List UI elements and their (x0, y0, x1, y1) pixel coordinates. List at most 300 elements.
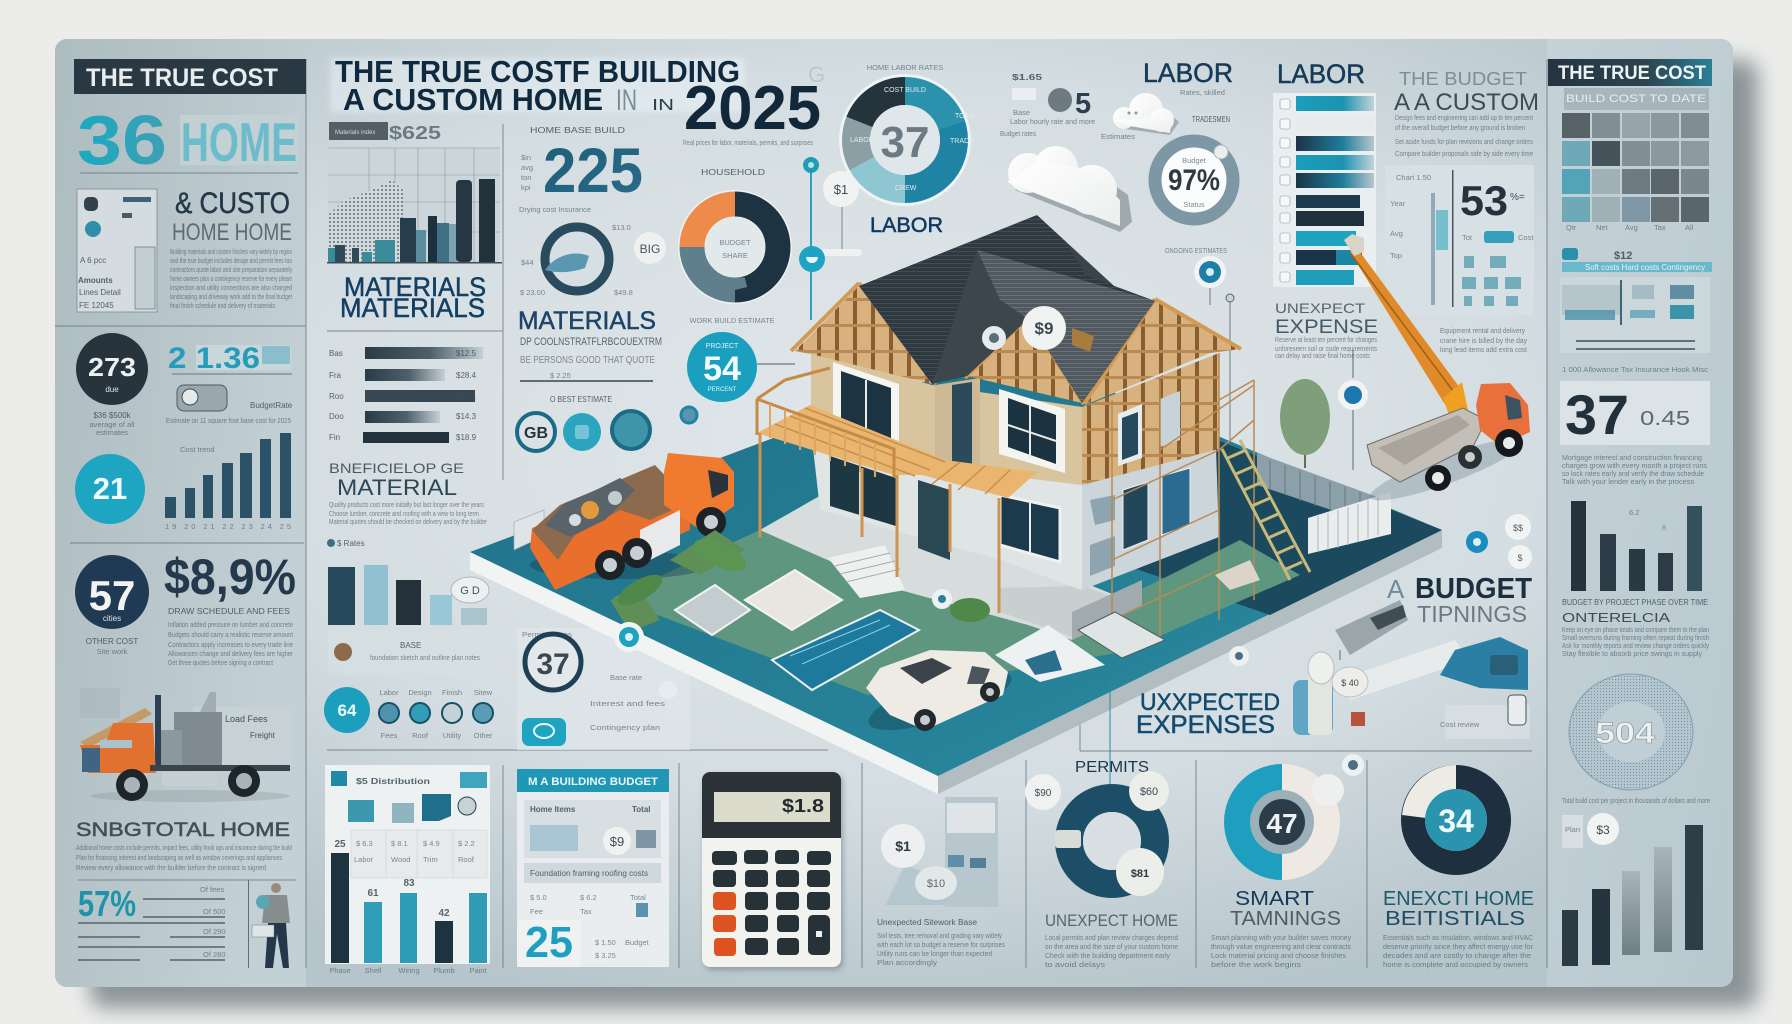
horizontal bar chart: materials breakdown: Bas (329, 349, 343, 358)
gauge: materials ring: $13.0 (612, 223, 631, 232)
section: permits donut: $90 (1035, 788, 1052, 799)
heading: a budget tips: A (1387, 574, 1405, 604)
right fence (1257, 453, 1391, 554)
panel: custom home document (77, 189, 157, 312)
panel: custom home document: A 6 pcc (80, 256, 106, 265)
illustration: house under construction (757, 215, 1310, 650)
card: budget worksheet with 25: M A BUILDING BUDGET (528, 776, 658, 788)
text: chart caption (1562, 598, 1709, 658)
stat circle: 57: OTHER COST (86, 637, 138, 646)
panel: bar chart card with icons: $ 2.2 (458, 839, 475, 848)
bar chart: right column upper: 8 (1662, 525, 1666, 532)
grid: cost tiles: Avg (1625, 223, 1638, 232)
section: permits donut: UNEXPECT HOME (1045, 911, 1178, 930)
text: unexpected expense: EXPENSE (1275, 317, 1378, 338)
foundation and steps (760, 490, 1142, 640)
small notes top: Budget rates (1000, 129, 1036, 138)
small badges near right edge of platform (1466, 514, 1532, 569)
bar chart: rising costs (165, 433, 291, 531)
text block beside crane: long lead items add extra cost (1440, 345, 1528, 354)
panel: custom home document: Lines Detail (79, 288, 121, 297)
icon row: four cost categories: Fees (381, 731, 398, 740)
panel: stat 37 in ring: Permit ranges (522, 630, 572, 639)
panel: bar chart card with icons: $ 6.3 (356, 839, 373, 848)
card: budget worksheet with 25 (517, 769, 669, 967)
panel: custom home document: Amounts (78, 276, 113, 285)
panel: bar chart card with icons: Labor (354, 855, 374, 864)
card: budget worksheet with 25: Total (630, 893, 646, 902)
stat circle: 54 (687, 316, 795, 402)
bar chart: material swatches (327, 539, 490, 675)
heading: benefits of materials: BNEFICIELOP GE (329, 460, 464, 476)
horizontal bar chart: materials breakdown: Doo (329, 412, 344, 421)
stat: 225: avg (521, 163, 533, 172)
panel: bar chart card with icons: $ 8.1 (391, 839, 408, 848)
stat: 57 percent with progress lines: 57% (78, 883, 136, 924)
stat: 57 percent with progress lines: Of fees (200, 885, 224, 894)
section: permits donut: $81 (1131, 868, 1149, 880)
heading: additional home: SNBGTOTAL HOME (76, 820, 290, 841)
card: 53 percent: Top (1390, 251, 1402, 260)
grid: cost tiles: Net (1596, 223, 1609, 232)
section: smart tips donut: through value engineering and clear contracts (1211, 942, 1351, 951)
stat: 8.9 percent: Allowances change and delivery fees are higher (168, 649, 293, 658)
photo collage with badges (881, 797, 998, 907)
right column header: THE TRUE COST (1558, 63, 1706, 84)
card: 53 percent: Chart 1.50 (1396, 173, 1431, 182)
donut chart: labor 37: LABOR (850, 137, 874, 144)
text block under collage: Soil tests, tree removal and grading vary widely (877, 931, 1002, 940)
stat circle: 57: Site work (97, 647, 128, 656)
balcony deck (757, 368, 1037, 613)
small badges near right edge of platform: $$ (1513, 523, 1523, 533)
text block: final finish schedule and delivery of materials (170, 301, 275, 310)
card: budget worksheet with 25: $ 6.2 (580, 893, 597, 902)
labels near small cloud: TRADESMEN (1192, 115, 1230, 124)
panel: bar chart card with icons: $5 Distribution (356, 777, 430, 786)
text: chart caption: Stay flexible to absorb price swings in supply (1562, 649, 1702, 658)
illustration: budget tools: Cost review (1440, 720, 1480, 729)
heading: a budget tips (1387, 573, 1532, 627)
horizontal bar chart: materials breakdown: Fin (329, 433, 340, 442)
section: smart tips donut: before the work begins (1211, 960, 1301, 969)
connector pin near tree (1338, 350, 1368, 470)
lawn on platform (613, 530, 1300, 695)
panel: bar chart card with icons: Wood (391, 855, 410, 864)
illustration: calculator (702, 772, 841, 967)
small notes top: Base (1013, 108, 1030, 117)
gauge: materials ring: $49.8 (614, 288, 633, 297)
illustration: calculator: $1.8 (782, 796, 824, 816)
small label bar (329, 122, 441, 143)
labels near small cloud (1101, 88, 1230, 141)
stat circle: 273: due (105, 385, 119, 394)
title: IN (616, 84, 637, 117)
stat circle: 273 (76, 333, 148, 437)
card: 53 percent: Avg (1390, 229, 1403, 238)
labels near small cloud: Estimates (1101, 132, 1135, 141)
stat circle: 273: 273 (88, 352, 136, 382)
illustration: orange semi truck (80, 688, 293, 802)
panel: bar chart card with icons: 42 (438, 908, 450, 919)
heading: custom home: HOME HOME (172, 219, 292, 246)
icon row: four cost categories: Roof (412, 731, 429, 740)
donut chart: labor 37: CREW (895, 185, 917, 192)
stat circle: 57 (75, 555, 149, 656)
stat: 36 home: HOME (181, 111, 297, 173)
stat: 8.9 percent: Budgets should carry a realistic reserve amount (168, 630, 294, 639)
section: essentials donut: Essentials such as insulation, windows and HVAC (1383, 933, 1534, 942)
text: unexpected expense: can delay and raise final home costs (1275, 351, 1370, 360)
bar chart: material swatches: BASE (400, 641, 421, 650)
panel: bar chart card with icons: Shell (365, 966, 382, 975)
dotted gauge: 504 (1562, 674, 1710, 805)
small notes top: $1.65 (1012, 73, 1043, 82)
panel: bar chart card with icons: Trim (423, 855, 438, 864)
small badges near right edge of platform: $ (1517, 553, 1523, 563)
stat box: 37: Talk with your lender early in the process (1562, 477, 1694, 486)
scaffolding (1112, 353, 1254, 650)
stat: 8.9 percent: Get three quotes before signing a contract (168, 658, 274, 667)
text block: and the true budget includes design and permit fees too (170, 256, 292, 265)
heading: labor right: LABOR (1277, 59, 1365, 89)
section: essentials donut: deserve priority since they affect energy use for (1383, 942, 1533, 951)
badge small (1229, 646, 1249, 666)
section: materials: BE PERSONS GOOD THAT QUOTE (520, 355, 655, 366)
teal stat strip with icons (166, 342, 293, 425)
icons: three materials badges: GB (524, 425, 548, 442)
section: permits donut (1025, 680, 1178, 969)
icon row: four cost categories: Labor (379, 688, 399, 697)
icon: small cloud (1113, 93, 1179, 135)
section: essentials donut: decades and are costly to change after the (1383, 951, 1531, 960)
title: G (808, 62, 825, 87)
card: 53 percent: 53 (1460, 177, 1508, 224)
heading: materials double: MATERIALS (344, 272, 486, 302)
heading: materials double: MATERIALS (340, 293, 485, 323)
heading: a budget tips: BUDGET (1415, 573, 1532, 605)
illustration: orange semi truck: Load Fees (225, 714, 268, 724)
heading: labor left: LABOR (1143, 58, 1233, 88)
card: budget worksheet with 25: $ 3.25 (595, 951, 616, 960)
lower walls (811, 430, 1219, 590)
teal labels and diagram: $12 (1614, 250, 1632, 262)
card: budget worksheet with 25: 25 (525, 918, 573, 967)
heading: custom home: & CUSTO (175, 187, 290, 220)
donut chart: labor 37: HOME LABOR RATES (867, 63, 943, 72)
panel: bar chart card with icons: 83 (403, 878, 415, 889)
icon row: four cost categories: Utility (443, 731, 461, 740)
upper walls (811, 350, 1219, 485)
teal labels and diagram: 1 000 Allowance Tax Insurance Hook Misc (1562, 365, 1708, 374)
donut chart: cost split (678, 168, 792, 304)
stat circle: 54: WORK BUILD ESTIMATE (690, 316, 774, 325)
card: 53 percent: Cost (1518, 233, 1534, 242)
stat circle: 57: 57 (89, 572, 135, 619)
heading: budget a custom: Set aside funds for plan revisions and change orders (1395, 137, 1533, 146)
site items on lawn: plans, blueprints and bags (610, 530, 1260, 690)
stat: 225: 225 (543, 136, 643, 206)
teal labels and diagram (1560, 248, 1712, 374)
gauge: materials ring: $44 (521, 258, 534, 267)
card: 53 percent: Tot (1462, 233, 1473, 242)
title: IN (652, 97, 674, 114)
section: permits donut: $60 (1140, 786, 1158, 798)
panel: stat 37 in ring: Contingency plan (590, 723, 660, 732)
heading: budget a custom (1394, 69, 1539, 158)
gables (791, 283, 1241, 405)
text block: home owners plan a contingency reserve for every phase (170, 274, 292, 283)
horizontal bar chart: materials breakdown: Roo (329, 392, 344, 401)
heading: benefits of materials: Material quotes should be checked on delivery and by the builder (329, 517, 487, 526)
section: essentials donut: ENEXCTI HOME (1383, 888, 1534, 910)
section: smart tips donut (1211, 754, 1364, 969)
bar chart: material swatches: $ Rates (337, 539, 365, 548)
heading: budget a custom: Compare builder proposals side by side every time (1395, 149, 1533, 158)
section: permits donut: to avoid delays (1045, 960, 1105, 969)
heading: unexpected expenses: UXXPECTED (1140, 689, 1280, 716)
text block under collage: with each lot so budget a reserve for surprises (876, 940, 1005, 949)
illustration: orange flatbed truck with materials (530, 453, 734, 590)
text: unexpected expense: unforeseen soil or code requirements (1275, 344, 1377, 353)
donut chart: cost split: HOUSEHOLD (701, 168, 765, 177)
gauge: materials ring: $ 23.00 (520, 288, 545, 297)
donut chart: cost split: SHARE (722, 251, 748, 260)
stat box: 37: Mortgage interest and construction financing (1562, 453, 1702, 462)
card: budget worksheet with 25: Home Items (530, 805, 576, 814)
heading: benefits of materials: Choose lumber, concrete and roofing with a view to long term (329, 509, 479, 518)
badge: big (634, 232, 666, 264)
heading: additional home: Plan for financing interest and landscaping as well as window coverings and appliances (76, 853, 282, 862)
section: permits donut: Local permits and plan review charges depend (1045, 933, 1178, 942)
stat box: 37: 37 (1565, 383, 1629, 446)
badge with connector: ONGOING ESTIMATES (1165, 246, 1227, 255)
dotted gauge: 504: 504 (1595, 717, 1655, 750)
card: budget worksheet with 25: Budget (625, 938, 650, 947)
heading: a budget tips: TIPNINGS (1417, 601, 1527, 627)
panel: bar chart card with icons: Paint (469, 966, 487, 975)
stat: 8.9 percent: DRAW SCHEDULE AND FEES (168, 607, 290, 616)
text: chart caption: BUDGET BY PROJECT PHASE OVER TIME (1562, 598, 1708, 607)
panel: bar chart card with icons: 61 (367, 888, 379, 899)
heading: unexpected expenses (1136, 689, 1280, 739)
card: budget worksheet with 25: Total (632, 805, 651, 814)
connector pins: $1 (834, 182, 848, 197)
icon row: four cost categories: 64 (338, 701, 357, 720)
donut chart: labor 37: COST BUILD (884, 87, 926, 94)
badge: big: BIG (640, 242, 660, 256)
stat circle: 54: 54 (703, 350, 741, 388)
stat: 225: ton (521, 173, 531, 182)
faint card behind stat 37 (517, 628, 690, 750)
illustration: orange semi truck: Freight (250, 731, 276, 740)
tree (1280, 379, 1330, 468)
gauge: 97 percent: Budget (1182, 156, 1207, 165)
gauge: 97 percent: Status (1183, 200, 1205, 209)
icon row: four cost categories: Design (408, 688, 432, 697)
roof (859, 215, 1155, 403)
card: 53 percent: %= (1510, 192, 1525, 203)
heading: budget a custom: Design fees and engineering can add up to ten percent (1395, 113, 1534, 122)
teal stat strip with icons: 2 1.36 (168, 342, 260, 375)
stat box: 37: so lock rates early and verify the draw schedule (1562, 469, 1704, 478)
section: permits donut: Check with the building department early (1045, 951, 1170, 960)
grid: cost tiles: Tax (1654, 223, 1666, 232)
donut chart: labor 37: TOTAL (955, 113, 977, 120)
label: labor under ring: LABOR (870, 214, 943, 237)
stat circle: teal 21: 21 (93, 471, 127, 506)
panel: bar chart card with icons: 25 (334, 839, 346, 850)
section: materials: DP COOLNSTRATFLRBCOUEXTRM (520, 336, 662, 348)
grid: cost tiles: All (1685, 223, 1694, 232)
stat: 8.9 percent: Contractors apply increases to every trade line (168, 640, 293, 649)
stat: 8.9 percent: $8,9% (164, 549, 296, 605)
section: smart tips donut: SMART (1235, 888, 1314, 910)
teal stat strip with icons: Estimate on 11 square foot base cost for 2025 (166, 416, 291, 425)
connector pins (799, 157, 862, 320)
title: THE TRUE COSTF BUILDING (335, 54, 740, 89)
section: essentials donut: home is complete and occupied by owners (1383, 960, 1528, 969)
icon row: four cost categories: Finish (442, 688, 462, 697)
text: unexpected expense (1275, 300, 1378, 360)
panel: bar chart card with icons: Wiring (398, 966, 420, 975)
grid: cost tiles: Qtr (1566, 223, 1577, 232)
heading: benefits of materials: MATERIAL (337, 475, 457, 500)
panel: stat 37 in ring: Interest and fees (590, 699, 665, 708)
text block: inspection and utility connections are also charged (170, 283, 292, 292)
text block beside crane (1440, 326, 1528, 354)
section: permits donut: on the area and the size of your custom home (1045, 942, 1178, 951)
section: materials: MATERIALS (518, 307, 656, 335)
heading: unexpected expenses: EXPENSES (1136, 711, 1275, 739)
teal labels and diagram: Soft costs Hard costs Contingency (1585, 263, 1705, 272)
bar chart: right column upper: 6.2 (1629, 508, 1639, 517)
title: 2025 (684, 74, 821, 143)
left fence (514, 510, 544, 550)
right column header (1548, 59, 1712, 110)
dotted gauge: 504: Total build cost per project in thousands of dollars and more (1562, 796, 1710, 805)
title (330, 54, 825, 147)
text: unexpected expense: Reserve at least ten percent for changes (1275, 335, 1377, 344)
panel: stat 37 in ring: Base rate (610, 673, 642, 682)
stat: 225: kpi (521, 183, 531, 192)
dormer vent (1072, 328, 1094, 352)
heading: additional home: Additional home costs include permits, impact fees, utility hook ups and insurance during the build (76, 843, 292, 852)
donut chart: labor 37 (839, 63, 977, 206)
text: chart caption: ONTERELCIA (1562, 610, 1670, 625)
text block: landscaping and driveway work add to the final budget (170, 292, 293, 301)
badge with connector (1165, 246, 1234, 470)
photo collage with badges: $1 (895, 838, 911, 854)
text: chart caption: Ask for monthly reports and review change orders quickly (1562, 641, 1709, 650)
section: smart tips donut: Smart planning with your builder saves money (1211, 933, 1351, 942)
section: smart tips donut: 47 (1266, 808, 1298, 839)
ladder (1222, 440, 1310, 580)
stat circle: 57: cities (103, 614, 121, 623)
section: essentials donut (1383, 765, 1534, 969)
stat circle: 273: estimates (96, 428, 128, 437)
heading: custom home (172, 187, 292, 246)
card: 53 percent (1385, 165, 1534, 315)
heading: benefits of materials: Quality products cost more initially but last longer over the years (329, 500, 484, 509)
illustration: budget tools: $ 40 (1341, 678, 1359, 688)
stat box: 37: charges grow with every month a project runs (1562, 461, 1707, 470)
section: materials (518, 307, 662, 404)
card: budget worksheet with 25: Fee (530, 907, 543, 916)
text block (170, 247, 293, 310)
text block: contractors quote labor and site preparation separately (170, 265, 292, 274)
icon: contractor figure (252, 883, 290, 968)
section: essentials donut: BEITISTIALS (1385, 908, 1525, 930)
horizontal bar chart: materials breakdown (329, 347, 483, 443)
gauge: 97 percent (1155, 141, 1233, 219)
stat: 8.9 percent: Inflation added pressure on lumber and concrete (168, 620, 293, 629)
card: budget worksheet with 25: Foundation framing roofing costs (530, 869, 648, 878)
card: budget worksheet with 25: $ 1.50 (595, 938, 616, 947)
card: budget worksheet with 25: Tax (580, 907, 592, 916)
stat circle: 54: PERCENT (708, 387, 737, 393)
labels near small cloud: Rates, skilled (1180, 88, 1225, 97)
donut chart: cost split: BUDGET (719, 238, 751, 247)
stat: 57 percent with progress lines: Of 500 (203, 907, 226, 916)
bar chart: right column lower: $3 (1596, 823, 1610, 837)
icons: three materials badges (517, 407, 697, 451)
stat: 225: $in (521, 153, 531, 162)
text block under collage (876, 918, 1005, 967)
text: chart caption: Small overruns during framing often repeat during finish (1562, 633, 1709, 642)
chart: labor list bars (1273, 93, 1376, 287)
title: A CUSTOM HOME (343, 82, 603, 117)
icon: large cloud (1007, 146, 1132, 232)
badges on house roof: $9 (1035, 319, 1053, 338)
stat: 8.9 percent (164, 549, 296, 667)
grid: cost tiles (1562, 113, 1709, 232)
section: permits donut: PERMITS (1075, 759, 1149, 776)
teal stat strip with icons: BudgetRate (250, 401, 293, 410)
heading: additional home: Review every allowance with the builder before the contract is signed (76, 863, 266, 872)
horizontal bar chart: materials breakdown: $12.5 (456, 349, 477, 358)
header bar: the true cost, left: THE TRUE COST (86, 64, 278, 92)
stat: 225: HOME BASE BUILD (530, 126, 625, 135)
bar chart: right column lower (1562, 813, 1703, 966)
panel: stat 37 in ring: 37 (536, 648, 570, 681)
icon row: four cost categories: Other (474, 731, 493, 740)
chart: materials price grid (327, 148, 502, 264)
text block: Building materials and custom finishes vary widely by region (170, 247, 292, 256)
text block under collage: Plan accordingly (877, 958, 937, 967)
illustration: white car (862, 650, 1018, 742)
stat: 36 home: 36 (77, 101, 167, 179)
text block under collage: Utility runs can be longer than expected (877, 949, 992, 958)
heading: budget a custom: of the overall budget before any ground is broken (1395, 123, 1525, 132)
gauge: materials ring (520, 223, 633, 297)
panel: bar chart card with icons: Phase (329, 966, 351, 975)
right column header: BUILD COST TO DATE (1566, 93, 1706, 105)
heading: budget a custom: A A CUSTOM (1394, 89, 1539, 116)
horizontal bar chart: materials breakdown: $22.1 (456, 392, 477, 401)
panel: bar chart card with icons: $ 4.9 (423, 839, 440, 848)
stat circle: 273: $36 $500k (93, 411, 132, 420)
text block beside crane: crane hire is billed by the day (1440, 336, 1527, 345)
panel: custom home document: FE 12045 (79, 301, 114, 310)
illustration: crane truck (1344, 234, 1530, 511)
card: budget worksheet with 25: $ 5.0 (530, 893, 547, 902)
badge: oval callout (451, 577, 489, 603)
donut chart: labor 37: 37 (881, 118, 929, 167)
heading: benefits of materials (329, 460, 487, 526)
horizontal bar chart: materials breakdown: $14.3 (456, 412, 477, 421)
illustration: budget tools (1293, 600, 1530, 739)
